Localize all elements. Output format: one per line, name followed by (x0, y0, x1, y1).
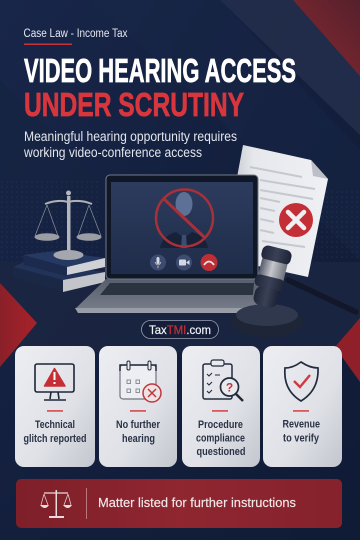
card: technical glitch: glitch reported (24, 433, 86, 445)
icon: monitor warning (35, 364, 74, 400)
laptop (75, 175, 262, 313)
stacked books (13, 251, 105, 292)
TaxTMI logo pill (142, 320, 218, 338)
upper book (23, 251, 105, 267)
card: technical glitch: Technical (35, 419, 75, 431)
card: procedure compliance: questioned (196, 446, 246, 458)
TaxTMI logo pill: TaxTMI.com (149, 323, 211, 337)
laptop screen (111, 182, 253, 274)
blocked person (156, 190, 213, 248)
red corner top right (293, 0, 360, 76)
card: revenue to verify: to verify (283, 432, 320, 444)
laptop base (75, 279, 262, 309)
bottom banner (16, 479, 342, 528)
card: procedure compliance: Procedure (198, 419, 243, 431)
card: procedure compliance (182, 346, 260, 467)
sound block (231, 307, 303, 337)
mic button (150, 254, 166, 270)
red diamond left (0, 283, 37, 367)
gavel (231, 244, 356, 337)
card: revenue to verify: Revenue (282, 418, 320, 430)
red x badge (279, 203, 313, 237)
icon: calendar cross (120, 361, 161, 402)
red rule (24, 44, 72, 45)
head (249, 244, 293, 310)
bottom banner: Matter listed for further instructions (98, 495, 296, 510)
keyboard (100, 283, 254, 295)
card: no further hearing: hearing (122, 433, 155, 445)
subtitle: working video-conference access (23, 145, 202, 160)
document with rejection mark (222, 145, 328, 277)
camera button (176, 254, 192, 270)
card: procedure compliance: compliance (196, 432, 245, 444)
eyebrow label: Case Law - Income Tax (24, 28, 128, 40)
icon: shield check (285, 362, 318, 401)
card: no further hearing (99, 346, 177, 467)
card: no further hearing: No further (116, 419, 161, 431)
subtitle (23, 129, 237, 160)
laptop lid (106, 175, 258, 279)
icon: scales (40, 490, 72, 518)
scales of justice (34, 190, 102, 260)
card: revenue to verify (263, 346, 342, 467)
handle (288, 280, 356, 312)
title line 2: UNDER SCRUTINY (24, 86, 244, 123)
card: technical glitch (15, 346, 95, 467)
icon: clipboard with magnifier: ? (226, 380, 233, 394)
lower book (13, 262, 105, 280)
subtitle: Meaningful hearing opportunity requires (24, 129, 237, 144)
end call button (200, 254, 218, 271)
red corner right (335, 318, 360, 382)
